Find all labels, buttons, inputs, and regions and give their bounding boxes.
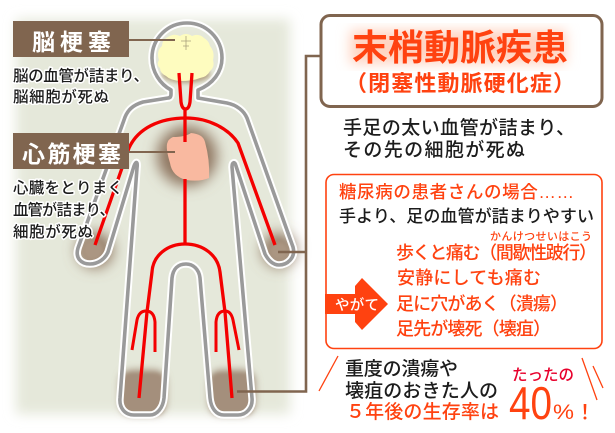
panel: diabetes box (325, 174, 602, 348)
symptom list: 足先が壊死（壊疽） (396, 318, 551, 339)
ruby reading: かんけつせいはこう (490, 230, 592, 243)
text: definition: 手足の太い血管が詰まり、 (343, 117, 575, 139)
40 percent: 40 (509, 377, 552, 429)
connector: brain label (129, 39, 175, 41)
survival callout (319, 356, 603, 429)
connector: heart label (129, 151, 175, 153)
subtitle: （閉塞性動脈硬化症） (345, 71, 575, 96)
diabetes text: 手より、足の血管が詰まりやすい (339, 206, 594, 226)
title: 末梢動脈疾患 (352, 27, 568, 68)
affected feet fill (122, 374, 252, 414)
arteries (95, 73, 275, 398)
symptom list (396, 243, 597, 339)
40 percent (509, 377, 595, 429)
shading: affected areas (77, 126, 296, 415)
label: 脳梗塞: 脳梗塞 (32, 29, 111, 55)
text: definition: その先の細胞が死ぬ (343, 139, 525, 161)
arrow: やがて (325, 278, 388, 330)
label: 心筋梗塞: 心筋梗塞 (22, 141, 121, 167)
survival text: 重度の潰瘍や (345, 358, 458, 380)
40 percent: ！ (575, 402, 595, 424)
heart (167, 133, 209, 181)
survival text: 壊疽のおきた人の (345, 380, 498, 402)
title glow (350, 30, 566, 64)
label: 心筋梗塞 (13, 133, 129, 169)
text: heart description: 心臓をとりまく (13, 179, 123, 197)
たったの: たったの (512, 366, 574, 384)
emphasis marks (319, 356, 603, 400)
symptom list: 歩くと痛む（間歇性跛行） (396, 243, 597, 263)
survival text highlight: ５年後の生存率は (346, 401, 499, 423)
affected hands fill (82, 239, 289, 261)
text: heart description: 血管が詰まり、 (13, 200, 115, 219)
arrow: やがて: やがて (335, 296, 379, 314)
body figure (77, 23, 296, 415)
connector: hand and foot to title (237, 56, 320, 392)
label: 脳梗塞 (13, 21, 129, 57)
text: brain description: 脳細胞が死ぬ (13, 87, 109, 106)
body outline (77, 23, 294, 415)
symptom list: 安静にしても痛む (397, 268, 541, 288)
text: heart description: 細胞が死ぬ (13, 222, 93, 241)
symptom list: 足に穴があく（潰瘍） (396, 293, 568, 314)
panel: title box (321, 16, 602, 106)
panel: body background (16, 19, 290, 414)
text: brain description: 脳の血管が詰まり、 (13, 66, 149, 85)
brain (158, 34, 214, 83)
40 percent: % (553, 401, 574, 424)
diabetes heading: 糖尿病の患者さんの場合…… (339, 182, 574, 202)
